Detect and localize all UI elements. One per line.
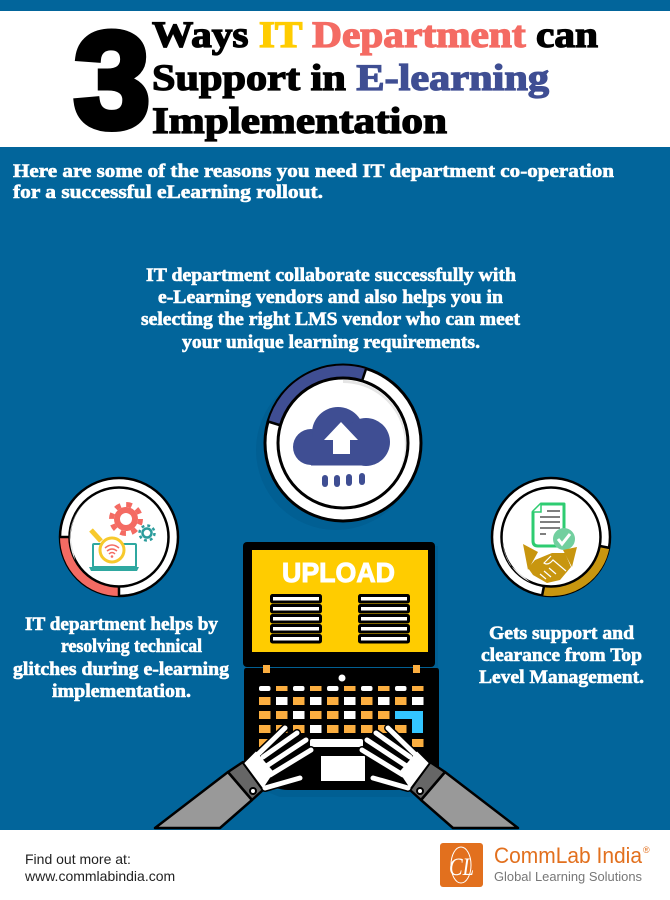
intro text: for a successful eLearning rollout. [13,183,323,203]
blue L key [395,711,423,733]
left hand and arm [155,728,311,828]
logo: CL [449,854,474,881]
file list right [360,596,408,642]
icon: check badge [553,528,575,550]
right text block: Level Management. [479,668,644,688]
intro text [13,162,615,203]
center text block: e-Learning vendors and also helps you in [158,288,504,308]
title line 1: Ways IT Department can [152,15,598,56]
icon: handshake [523,544,577,583]
center text block: your unique learning requirements. [182,333,480,353]
left text block: IT department helps by [25,615,219,635]
laptop keyboard base [244,665,439,797]
title banner [0,4,670,156]
intro text: Here are some of the reasons you need IT department co-operation [13,162,615,182]
right hand and arm [362,728,518,828]
footer link text [24,851,175,884]
icon: laptop with magnifier and wifi [89,530,139,571]
right text block [479,624,644,688]
logo: Global Learning Solutions [494,869,642,884]
center text block: IT department collaborate successfully with [146,266,517,286]
progress arc [274,371,364,423]
keys [259,686,424,747]
footer link text: Find out more at: [25,851,131,867]
center text block: selecting the right LMS vendor who can meet [141,310,521,330]
left badge: technical glitches [60,478,178,596]
icon: teal gear [140,526,154,540]
center text block [141,266,521,353]
left text block: glitches during e-learning [13,660,230,680]
laptop screen [243,542,438,671]
file list left [272,596,320,642]
left text block: resolving technical [61,637,202,657]
left text block [13,615,230,702]
right text block: Gets support and [489,624,635,644]
laptop illustration [155,542,518,828]
logo: CommLab India [494,843,643,868]
big numeral 3: 3 [74,4,150,156]
logo: ® [643,845,650,855]
center badge: cloud upload [256,365,421,530]
right badge: management clearance [492,478,610,596]
right text block: clearance from Top [481,646,642,666]
title line 2: Support in E-learning [152,58,550,99]
logo [440,843,650,887]
footer link text: www.commlabindia.com [24,868,175,884]
left text block: implementation. [52,682,191,702]
icon: red gear [112,504,140,534]
upload label: UPLOAD [282,557,395,588]
title line 3: Implementation [152,101,447,142]
icon: document [533,504,564,546]
footer [0,830,670,900]
icon: cloud [293,407,390,487]
